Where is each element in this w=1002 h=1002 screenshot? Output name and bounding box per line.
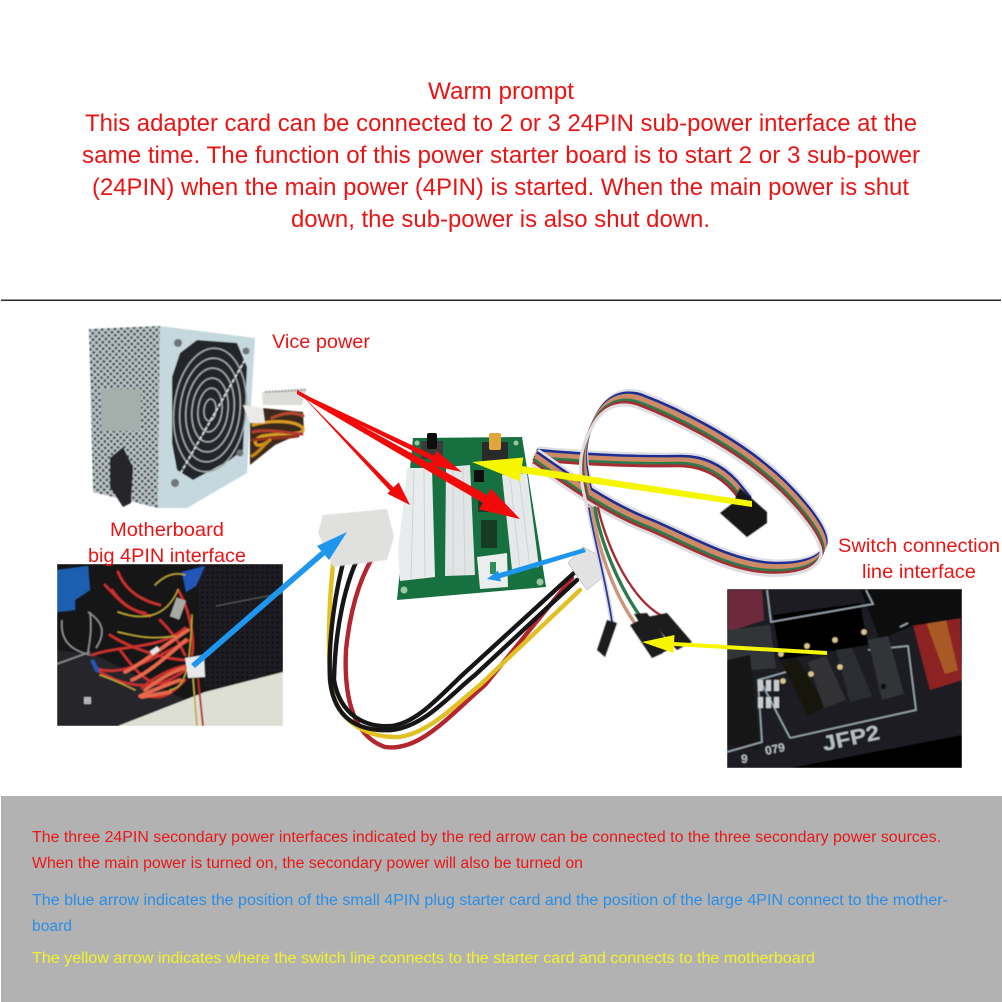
arrow: yellow to motherboard header <box>642 635 827 655</box>
notice text line 1: This adapter card can be connected to 2 or 3 24PIN sub-power interface at the <box>85 110 917 137</box>
image: JFP2 motherboard header photo: JFP2 <box>820 721 882 756</box>
image: 4-wire power cable <box>329 549 580 747</box>
red arrow note <box>32 829 941 872</box>
heading: warm prompt notice <box>82 78 920 233</box>
connector: 24PIN right <box>502 473 539 570</box>
image: small 4PIN plug <box>568 547 603 590</box>
icon: yellow push button <box>482 433 508 463</box>
notice text line 2: same time. The function of this power starter board is to start 2 or 3 sub-power <box>82 142 920 169</box>
arrow: red to middle connector <box>297 391 462 472</box>
arrow: red to right connector <box>297 390 520 519</box>
image: JFP2 motherboard header photo: 9 <box>741 752 748 766</box>
connector: 24PIN middle <box>445 465 475 576</box>
arrow: red to left connector <box>298 391 410 505</box>
image: ribbon switch cable <box>533 391 827 622</box>
image: power supply unit <box>89 326 307 508</box>
connector: 24PIN left <box>398 468 435 581</box>
panel: explanation of arrows <box>1 796 1002 1002</box>
image: starter board <box>397 433 546 600</box>
label: motherboard big 4PIN interface: big 4PIN interface <box>88 545 246 567</box>
connector pins <box>778 629 904 716</box>
blue arrow note: board <box>32 918 72 935</box>
notice text line 3: (24PIN) when the main power (4PIN) is started. When the main power is shut <box>92 174 909 201</box>
image: cable bundle photo inside case <box>57 564 283 726</box>
red arrow note: The three 24PIN secondary power interfaces indicated by the red arrow can be connected to the three secondary power sources. <box>32 829 941 846</box>
label: switch connection line interface: line interface <box>862 561 976 583</box>
image: large 4PIN molex connector <box>318 509 394 567</box>
title: Warm prompt <box>428 78 574 105</box>
arrows: blue 4PIN <box>191 532 586 668</box>
yellow arrow note: The yellow arrow indicates where the switch line connects to the starter card and connects to the motherboard <box>32 950 815 967</box>
blue arrow note <box>32 892 948 935</box>
arrow: yellow to board header <box>472 458 752 507</box>
arrow: blue to large 4PIN connector <box>191 532 347 668</box>
label: switch connection line interface: Switch connection <box>838 535 1000 557</box>
blue arrow note: The blue arrow indicates the position of the small 4PIN plug starter card and the position of the large 4PIN connect to the mother- <box>32 892 948 909</box>
notice text line 4: down, the sub-power is also shut down. <box>291 206 710 233</box>
arrow: blue to small 4PIN socket <box>487 548 586 582</box>
image: JFP2 motherboard header photo <box>727 589 962 768</box>
label: switch connection line interface <box>838 535 1000 583</box>
icon: dupont plugs on ribbon end <box>720 488 767 537</box>
image: JFP2 motherboard header photo: 079 <box>764 740 787 758</box>
red arrow note: When the main power is turned on, the secondary power will also be turned on <box>32 855 583 872</box>
arrows: red secondary power <box>297 390 520 519</box>
label: vice power: Vice power <box>272 331 371 353</box>
icon: dupont plugs on loose wires <box>597 613 692 658</box>
label: motherboard big 4PIN interface <box>88 519 246 567</box>
arrows: yellow switch line <box>472 458 827 655</box>
icon: black push button <box>421 433 443 459</box>
connector: white 4PIN socket <box>477 553 508 589</box>
label: motherboard big 4PIN interface: Motherboard <box>110 519 224 541</box>
